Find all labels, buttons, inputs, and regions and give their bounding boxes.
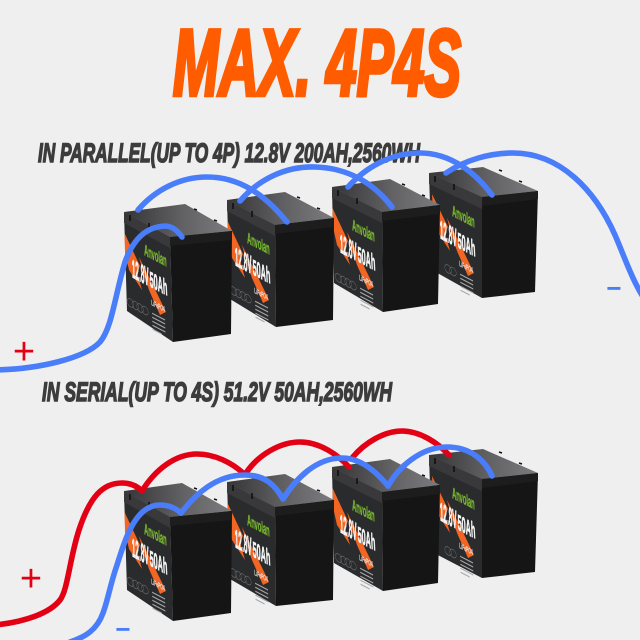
serial battery 1: 50Ah	[149, 546, 168, 580]
serial battery 4: 50Ah	[457, 510, 476, 544]
parallel plus sign: +	[13, 331, 35, 373]
parallel battery 1: LiFePO4	[151, 299, 165, 315]
serial battery 4: Anvolan	[452, 483, 475, 514]
serial battery 1: Anvolan	[144, 519, 167, 550]
parallel battery 2: 50Ah	[252, 255, 271, 289]
serial battery 2: Anvolan	[247, 510, 270, 541]
parallel battery 2: Anvolan	[247, 228, 270, 259]
parallel battery 3: 50Ah	[357, 242, 376, 276]
parallel battery 3: Anvolan	[352, 215, 375, 246]
parallel battery 2	[227, 192, 334, 327]
serial battery 4: 12.8V	[439, 498, 457, 535]
parallel battery 1	[124, 204, 232, 342]
parallel battery 4	[429, 167, 538, 299]
serial battery 2: 12.8V	[234, 525, 252, 562]
serial battery 2	[227, 474, 334, 608]
serial battery 4	[429, 449, 538, 581]
parallel battery 2: 12.8V	[234, 243, 252, 280]
serial wiring: red cables	[0, 431, 449, 625]
parallel battery 1: Anvolan	[144, 240, 167, 271]
parallel battery 4: 12.8V	[439, 216, 457, 253]
parallel battery 4: 50Ah	[457, 228, 476, 262]
serial battery 3: 50Ah	[357, 522, 376, 556]
serial battery 3	[332, 459, 440, 593]
parallel battery 3	[332, 179, 440, 313]
parallel battery 3: LiFePO4	[359, 274, 373, 290]
serial battery 4: LiFePO4	[459, 542, 473, 558]
heading: serial: IN SERIAL(UP TO 4S) 51.2V 50AH,2560WH	[42, 377, 392, 407]
serial battery 3: LiFePO4	[359, 554, 373, 570]
serial battery 3: Anvolan	[352, 495, 375, 526]
heading: parallel: IN PARALLEL(UP TO 4P) 12.8V 200AH,2560WH	[38, 138, 420, 168]
serial battery 1	[124, 483, 232, 621]
parallel wiring: blue cables	[0, 153, 640, 370]
serial battery 2: 50Ah	[252, 537, 271, 571]
parallel battery 1: 12.8V	[131, 255, 149, 292]
parallel minus sign: −	[606, 273, 622, 303]
serial battery 1: LiFePO4	[151, 578, 165, 594]
parallel battery 4: LiFePO4	[459, 260, 473, 276]
parallel battery 1: 50Ah	[149, 267, 168, 301]
serial plus sign: +	[20, 558, 42, 600]
parallel battery 3: 12.8V	[339, 230, 357, 267]
serial wiring: blue cables	[70, 447, 492, 640]
serial battery 3: 12.8V	[339, 510, 357, 547]
serial battery 2: LiFePO4	[254, 569, 268, 585]
parallel battery 4: Anvolan	[452, 201, 475, 232]
parallel battery 2: LiFePO4	[254, 287, 268, 303]
serial battery 1: 12.8V	[131, 534, 149, 571]
